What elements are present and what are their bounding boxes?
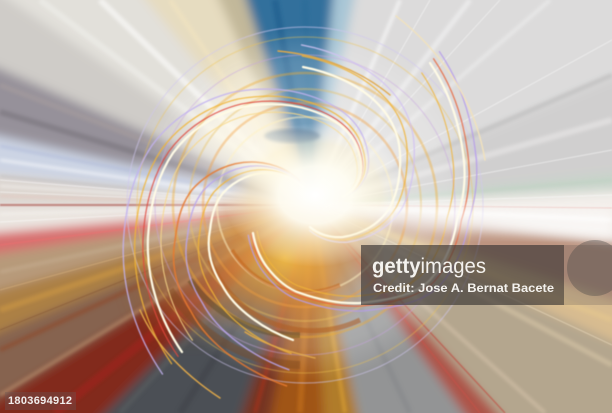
getty images logo text: gettyimages	[372, 255, 486, 278]
spiral arm: outer golden tails	[140, 16, 485, 398]
image id label: 1803694912	[8, 395, 72, 407]
watermark panel	[361, 240, 612, 305]
watermark circle	[567, 240, 612, 296]
pale upper-left fan	[180, 78, 312, 205]
spiral arms	[123, 16, 485, 398]
watermark light band	[564, 245, 612, 305]
concentric coloured rings	[127, 27, 483, 383]
spiral arm: bright cores	[148, 63, 465, 352]
warm orange glow below centre	[185, 173, 385, 343]
watermark dark band	[361, 245, 564, 305]
central white glow	[223, 123, 407, 267]
credit line: Credit: Jose A. Bernat Bacete	[373, 283, 554, 295]
spiral arm: colour echoes	[123, 45, 477, 386]
white flare to the right	[312, 205, 612, 238]
spiral disc tint	[127, 27, 483, 383]
rust tint in lower-left of disc	[140, 240, 240, 330]
dark blue pocket above centre	[264, 129, 320, 143]
image id label	[5, 392, 76, 410]
